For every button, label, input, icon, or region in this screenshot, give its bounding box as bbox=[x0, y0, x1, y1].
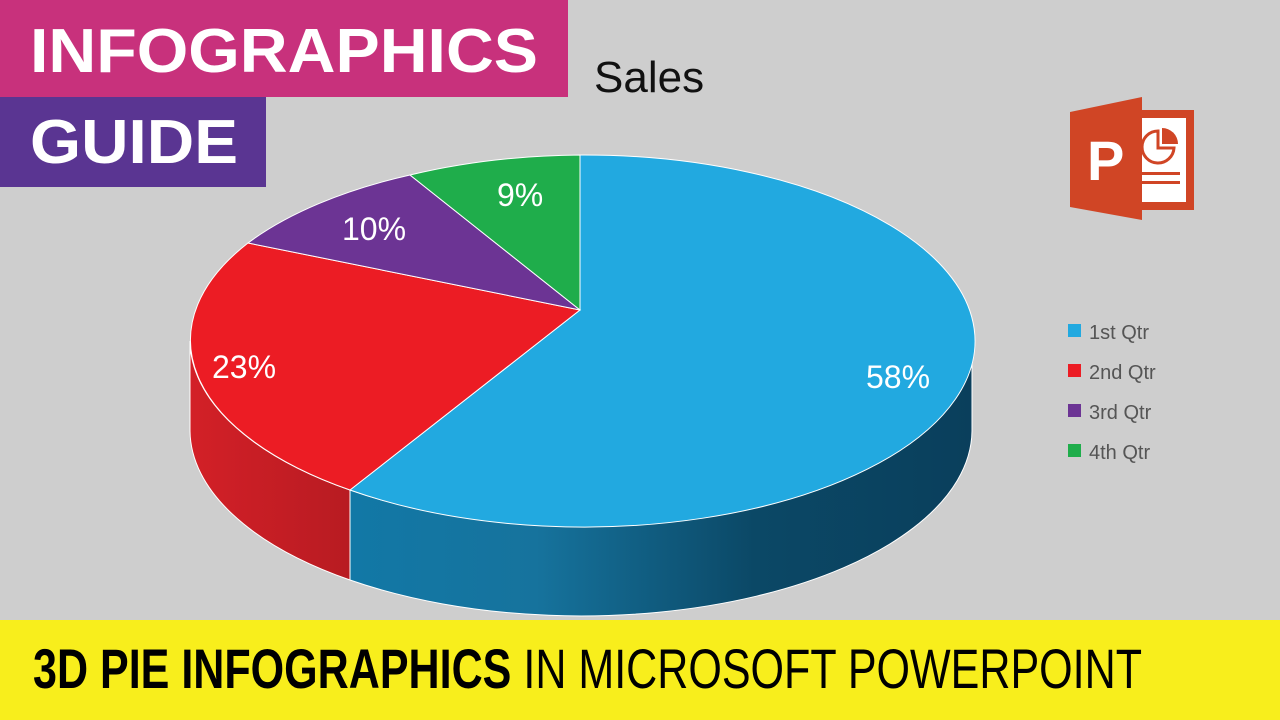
title banner: infographics: INFOGRAPHICS bbox=[30, 17, 538, 86]
title banner: infographics bbox=[0, 0, 568, 97]
legend: 2nd Qtr bbox=[1089, 362, 1156, 384]
legend bbox=[1068, 322, 1156, 464]
title banner: guide: GUIDE bbox=[30, 108, 238, 177]
pie side: 2nd qtr bbox=[190, 341, 350, 580]
legend: 1st Qtr bbox=[1089, 322, 1149, 344]
slice: 2nd qtr 23% bbox=[190, 243, 580, 490]
data labels: 10% bbox=[342, 211, 406, 247]
data labels: 23% bbox=[212, 349, 276, 385]
icon: powerpoint bbox=[1070, 97, 1194, 220]
data labels bbox=[212, 177, 930, 395]
data labels: 58% bbox=[866, 359, 930, 395]
slice: 4th qtr 9% bbox=[410, 155, 580, 310]
data labels: 9% bbox=[497, 177, 543, 213]
bottom banner bbox=[0, 620, 1280, 720]
legend: 3rd Qtr bbox=[1089, 402, 1152, 424]
legend: 4th Qtr bbox=[1089, 442, 1150, 464]
slice: 3rd qtr 10% bbox=[248, 175, 580, 310]
chart title: Sales bbox=[594, 53, 704, 102]
3d pie chart bbox=[190, 155, 975, 616]
icon: powerpoint: P bbox=[1087, 129, 1124, 192]
title banner: guide bbox=[0, 97, 266, 187]
slice: 1st qtr 58% bbox=[350, 155, 975, 527]
pie side: 1st qtr bbox=[350, 341, 972, 616]
